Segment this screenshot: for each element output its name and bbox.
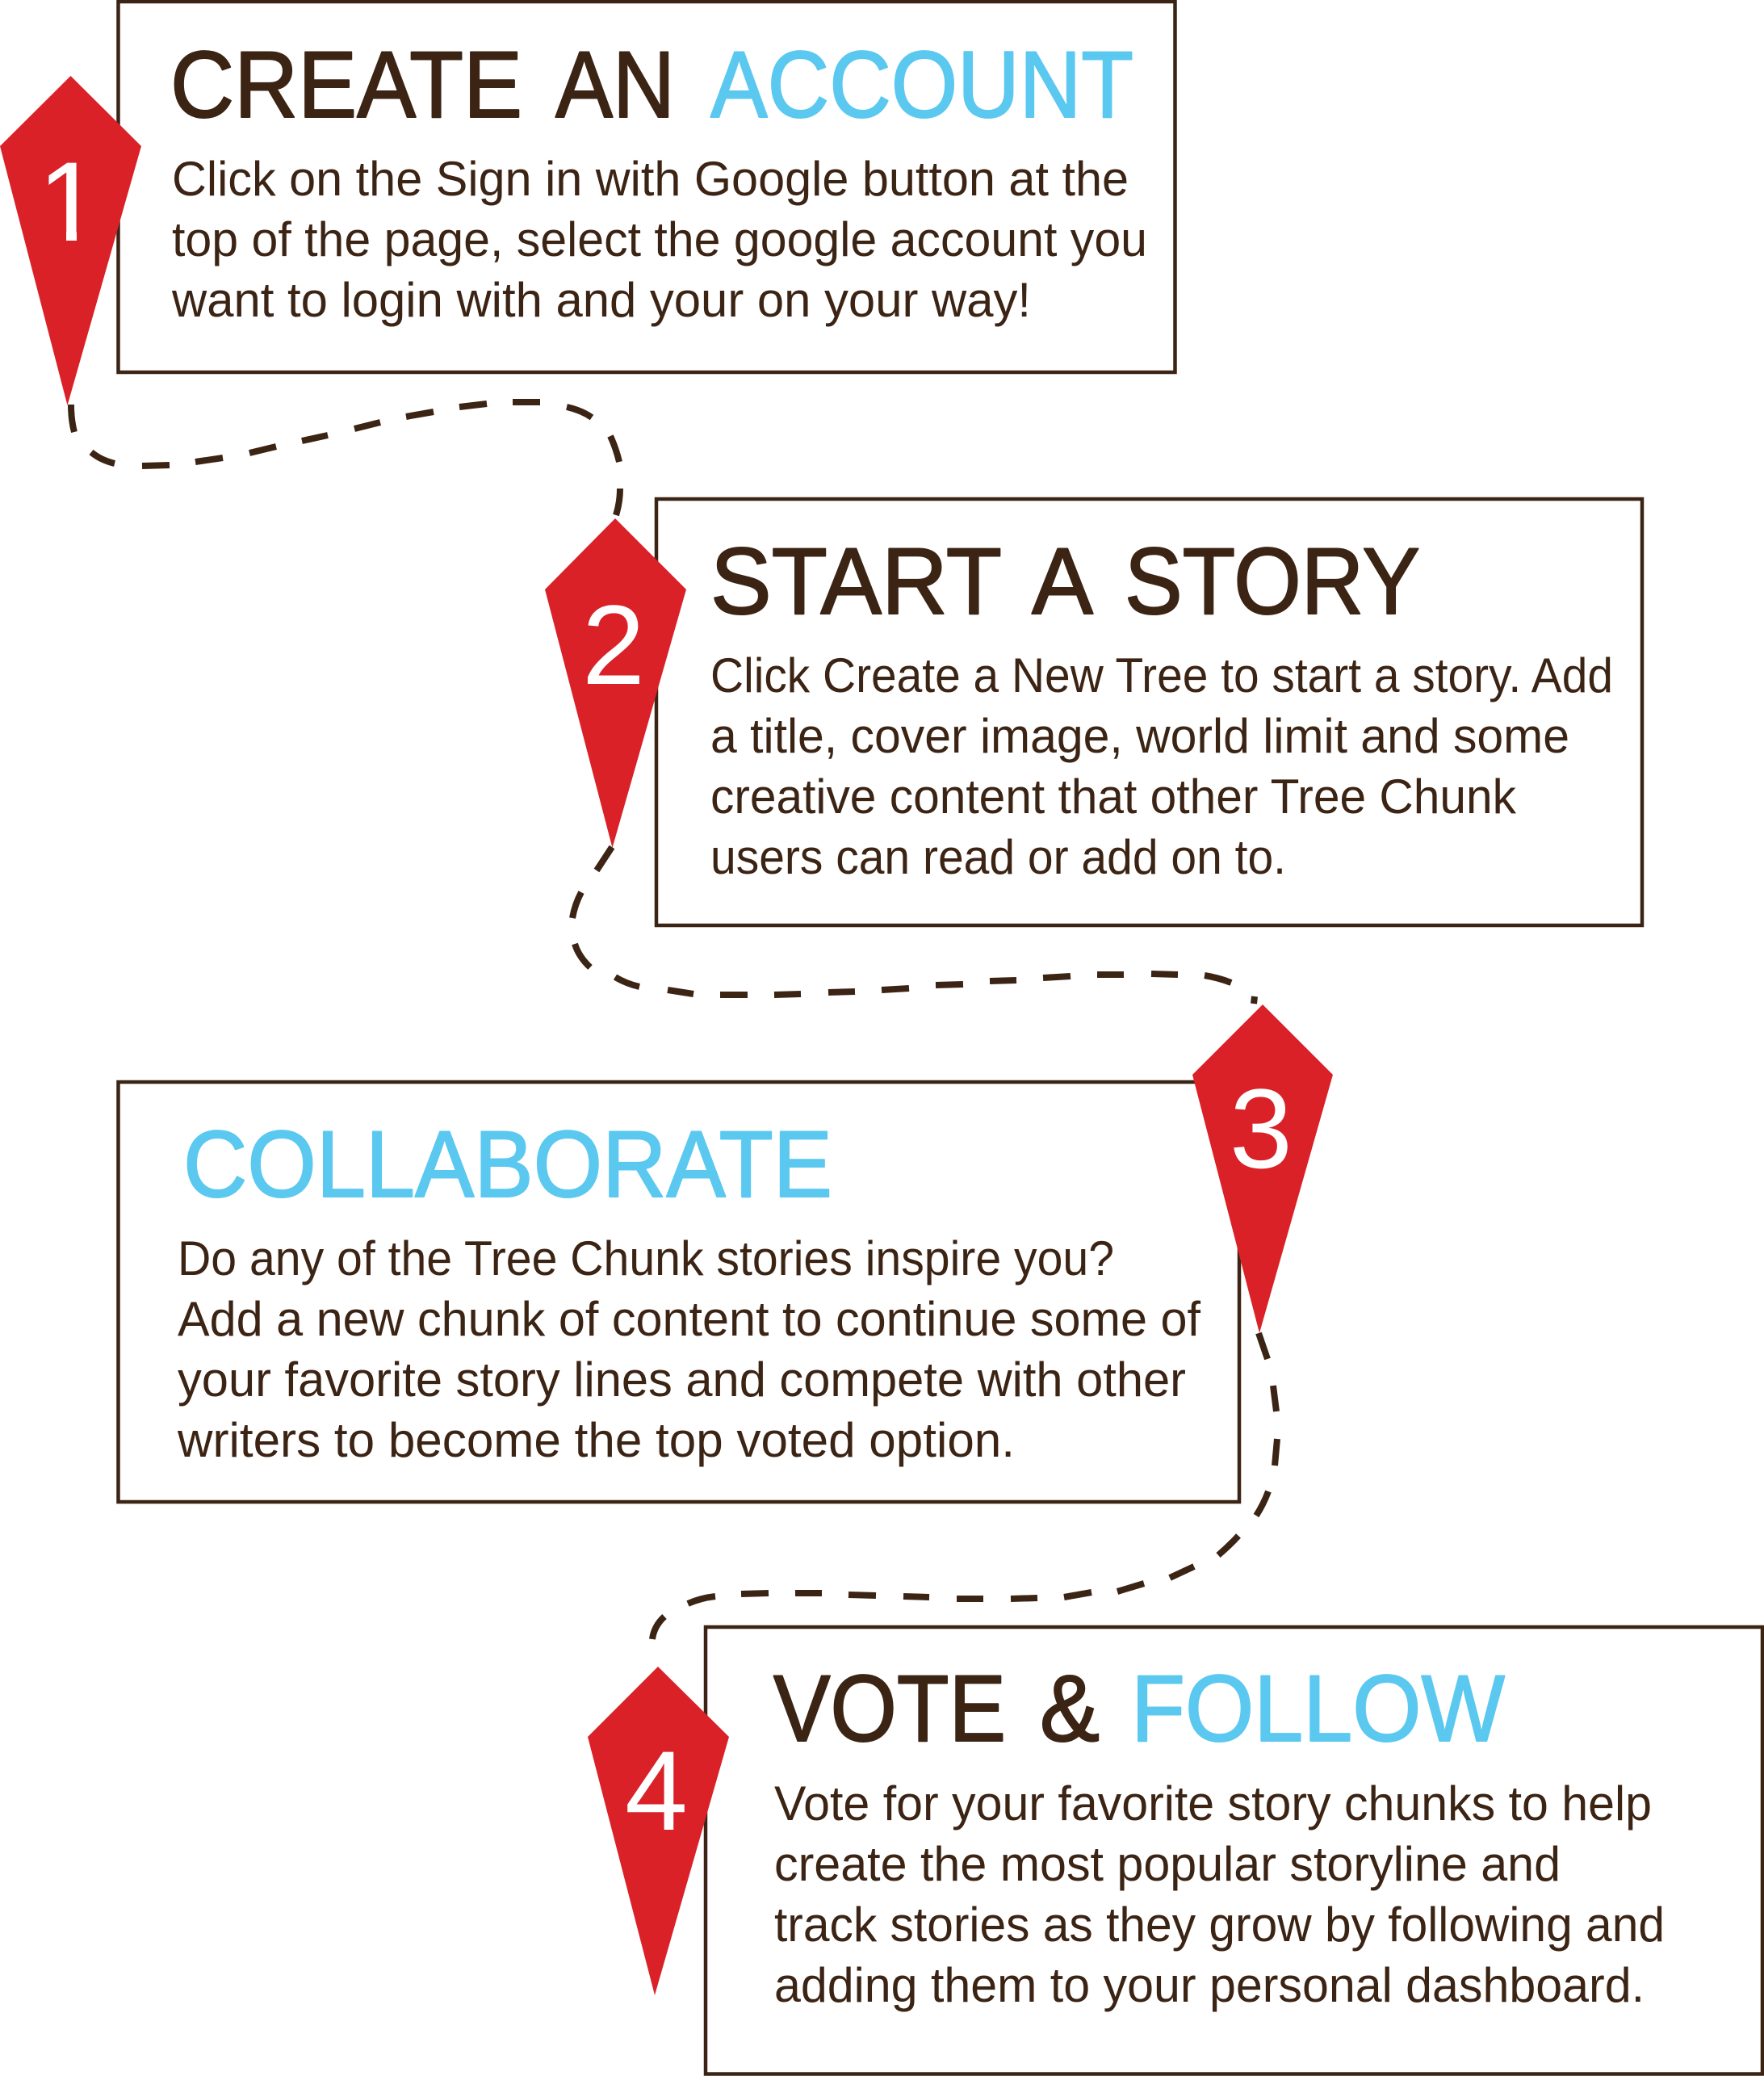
heading: start a story: STORY bbox=[1125, 528, 1420, 634]
heading: vote and follow bbox=[773, 1655, 1506, 1761]
heading: vote and follow: & bbox=[1040, 1655, 1100, 1761]
text: start a story description: a title, cover image, world limit and some bbox=[710, 709, 1569, 763]
dashed path: step 1 to step 2 bbox=[71, 402, 620, 515]
panel: create an account bbox=[118, 2, 1175, 372]
text: vote and follow description: track stories as they grow by following and bbox=[774, 1898, 1665, 1952]
kite marker: step 3: 3 bbox=[1230, 1065, 1293, 1192]
heading: create an account: AN bbox=[555, 31, 675, 137]
heading: start a story bbox=[710, 528, 1420, 634]
text: collaborate description: Add a new chunk of content to continue some of bbox=[178, 1292, 1200, 1346]
heading: create an account bbox=[170, 31, 1133, 137]
text: collaborate description: your favorite story lines and compete with other bbox=[178, 1353, 1186, 1407]
heading: create an account: ACCOUNT bbox=[710, 31, 1133, 137]
text: start a story description: Click Create a New Tree to start a story. Add bbox=[710, 648, 1613, 702]
text: collaborate description bbox=[177, 1231, 1200, 1467]
text: start a story description bbox=[710, 648, 1613, 884]
kite marker: step 1: 1 bbox=[38, 138, 101, 265]
heading: start a story: START bbox=[710, 528, 1002, 634]
kite marker: step 1 bbox=[0, 76, 141, 405]
kite marker: step 3 bbox=[1192, 1004, 1333, 1333]
text: start a story description: creative content that other Tree Chunk bbox=[710, 770, 1517, 824]
text: create an account description: Click on the Sign in with Google button at the bbox=[172, 152, 1129, 206]
text: vote and follow description: adding them to your personal dashboard. bbox=[774, 1958, 1645, 2012]
heading: start a story: A bbox=[1032, 528, 1093, 634]
text: start a story description: users can read or add on to. bbox=[710, 830, 1286, 884]
text: create an account description: want to login with and your on your way! bbox=[171, 273, 1031, 327]
kite marker: step 2: 2 bbox=[582, 581, 645, 708]
heading: vote and follow: FOLLOW bbox=[1131, 1655, 1506, 1761]
text: collaborate description: Do any of the Tree Chunk stories inspire you? bbox=[178, 1231, 1114, 1285]
kite marker: step 2 bbox=[545, 518, 686, 848]
heading: collaborate: COLLABORATE bbox=[183, 1111, 832, 1217]
text: vote and follow description: create the most popular storyline and bbox=[774, 1837, 1561, 1891]
heading: create an account: CREATE bbox=[170, 31, 522, 137]
text: vote and follow description: Vote for your favorite story chunks to help bbox=[774, 1776, 1652, 1831]
panel: collaborate bbox=[118, 1082, 1239, 1502]
kite marker: step 4 bbox=[588, 1667, 729, 1995]
heading: vote and follow: VOTE bbox=[773, 1655, 1006, 1761]
panel: start a story bbox=[656, 499, 1642, 925]
text: create an account description: top of the page, select the google account you bbox=[172, 212, 1147, 266]
text: collaborate description: writers to become the top voted option. bbox=[177, 1413, 1015, 1467]
dashed path: step 3 to step 4 bbox=[652, 1333, 1277, 1639]
text: vote and follow description bbox=[774, 1776, 1665, 2012]
kite marker: step 4: 4 bbox=[625, 1727, 688, 1854]
panel: vote and follow bbox=[706, 1627, 1762, 2074]
text: create an account description bbox=[171, 152, 1147, 327]
dashed path: step 2 to step 3 bbox=[572, 847, 1255, 1004]
